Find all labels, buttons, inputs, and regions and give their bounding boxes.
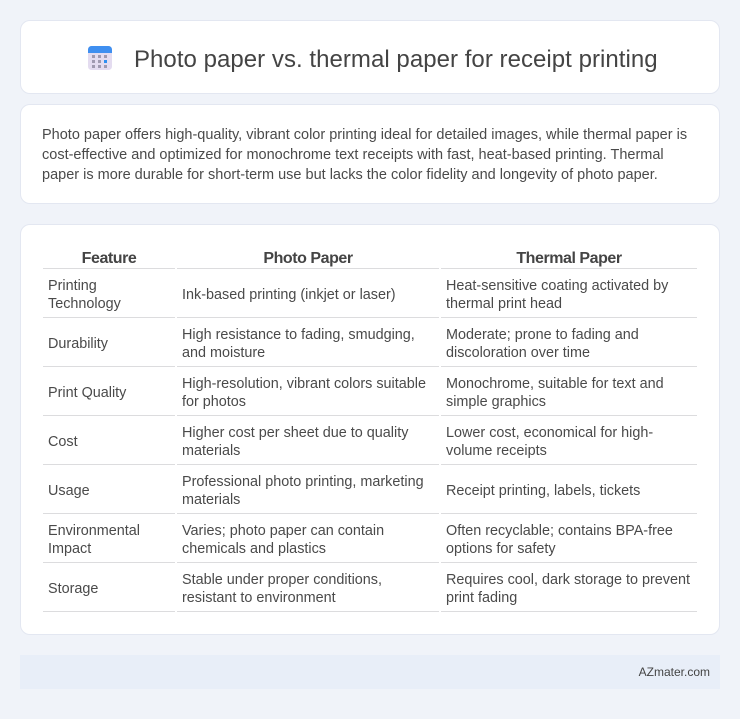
text: Professional photo printing, marketing (182, 474, 424, 490)
text: volume receipts (446, 443, 547, 459)
intro text: paper is more durable for short-term use but lacks the color fidelity and longevity of photo paper. (42, 167, 658, 183)
title: Photo paper vs. thermal paper for receipt printing (134, 46, 658, 73)
text: simple graphics (446, 394, 546, 410)
row: print quality: Print Quality (48, 385, 126, 401)
row: usage: Usage (48, 483, 90, 499)
text: Varies; photo paper can contain (182, 523, 384, 539)
footer bar (20, 655, 720, 689)
row: printing technology: Technology (48, 296, 121, 312)
intro text (42, 127, 687, 183)
row: environmental impact (48, 523, 140, 557)
row: environmental impact: Impact (48, 541, 91, 557)
row: storage: Storage (48, 581, 98, 597)
text: High-resolution, vibrant colors suitable (182, 376, 426, 392)
text: print fading (446, 590, 517, 606)
text: thermal print head (446, 296, 562, 312)
footer text: AZmater.com (639, 665, 710, 679)
text: Often recyclable; contains BPA-free (446, 523, 673, 539)
text: Receipt printing, labels, tickets (446, 483, 640, 499)
row: environmental impact: Environmental (48, 523, 140, 539)
text: discoloration over time (446, 345, 590, 361)
text: Higher cost per sheet due to quality (182, 425, 408, 441)
row: durability: Durability (48, 336, 108, 352)
table card (20, 224, 720, 635)
text: Moderate; prone to fading and (446, 327, 639, 343)
intro card (20, 104, 720, 204)
text: Lower cost, economical for high- (446, 425, 653, 441)
row: printing technology: Printing (48, 278, 97, 294)
text: and moisture (182, 345, 265, 361)
text: Ink-based printing (inkjet or laser) (182, 287, 396, 303)
text: chemicals and plastics (182, 541, 326, 557)
text: for photos (182, 394, 246, 410)
text: options for safety (446, 541, 556, 557)
table header: thermal paper: Thermal Paper (516, 250, 622, 267)
text: High resistance to fading, smudging, (182, 327, 415, 343)
text: Monochrome, suitable for text and (446, 376, 664, 392)
table header: feature: Feature (82, 250, 136, 267)
text: materials (182, 443, 240, 459)
text: Heat-sensitive coating activated by (446, 278, 668, 294)
title card (20, 20, 720, 94)
text: Stable under proper conditions, (182, 572, 382, 588)
text: resistant to environment (182, 590, 336, 606)
text: Requires cool, dark storage to prevent (446, 572, 690, 588)
intro text: cost-effective and optimized for monochrome text receipts with fast, heat-based printing. Thermal (42, 147, 664, 163)
text: materials (182, 492, 240, 508)
intro text: Photo paper offers high-quality, vibrant color printing ideal for detailed images, while thermal paper is (42, 127, 687, 143)
row: cost: Cost (48, 434, 78, 450)
icon: calendar grid (88, 46, 112, 70)
table header: photo paper: Photo Paper (263, 250, 353, 267)
row: printing technology (48, 278, 121, 312)
